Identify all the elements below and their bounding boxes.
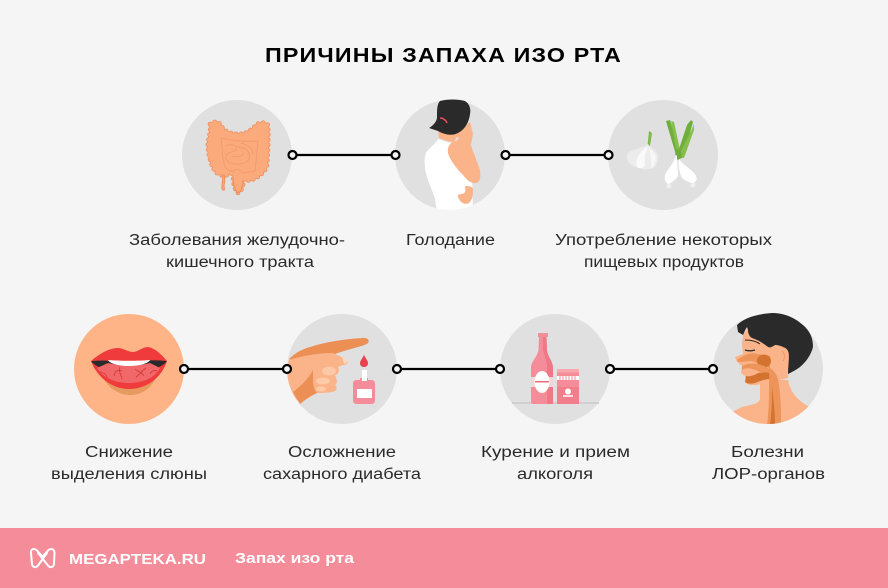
logo text: MEGAPTEKA.RU <box>69 551 206 568</box>
icon: logo <box>31 549 54 567</box>
label: certain foods: пищевых продуктов <box>584 254 744 271</box>
label: certain foods <box>555 232 772 271</box>
label: reduced saliva: Снижение <box>85 444 173 461</box>
label: smoking and alcohol: Курение и прием <box>481 444 630 461</box>
label: diabetes complication <box>263 444 421 483</box>
label: gastrointestinal diseases: Заболевания желудочно- <box>129 232 345 249</box>
icon: dry mouth <box>74 314 184 424</box>
icon: intestines <box>182 100 292 210</box>
connector nodes <box>180 151 717 373</box>
label: smoking and alcohol <box>481 444 630 483</box>
connectors row 1 <box>292 154 608 156</box>
icon: garlic and spring onions <box>608 100 718 210</box>
label: diabetes complication: сахарного диабета <box>263 466 421 483</box>
label: diabetes complication: Осложнение <box>288 444 396 461</box>
icon: hand and blood glucose test <box>282 314 397 424</box>
label: gastrointestinal diseases <box>129 232 345 271</box>
label: certain foods: Употребление некоторых <box>555 232 772 249</box>
title: ПРИЧИНЫ ЗАПАХА ИЗО РТА <box>265 45 622 67</box>
label: ENT diseases <box>712 444 825 483</box>
label: ENT diseases: ЛОР-органов <box>712 466 825 483</box>
label: gastrointestinal diseases: кишечного тракта <box>166 254 314 271</box>
label: ENT diseases: Болезни <box>731 444 804 461</box>
label: reduced saliva: выделения слюны <box>51 466 207 483</box>
icon: head ENT cross section <box>713 313 823 430</box>
footer band <box>0 528 888 588</box>
label: smoking and alcohol: алкоголя <box>517 466 593 483</box>
label: fasting: Голодание <box>406 232 495 249</box>
footer topic: Запах изо рта <box>235 550 355 567</box>
icon: bottle and cigarettes <box>500 314 610 424</box>
icon: woman with hunger <box>395 100 505 212</box>
connectors row 2 <box>184 368 713 370</box>
label: reduced saliva <box>51 444 207 483</box>
